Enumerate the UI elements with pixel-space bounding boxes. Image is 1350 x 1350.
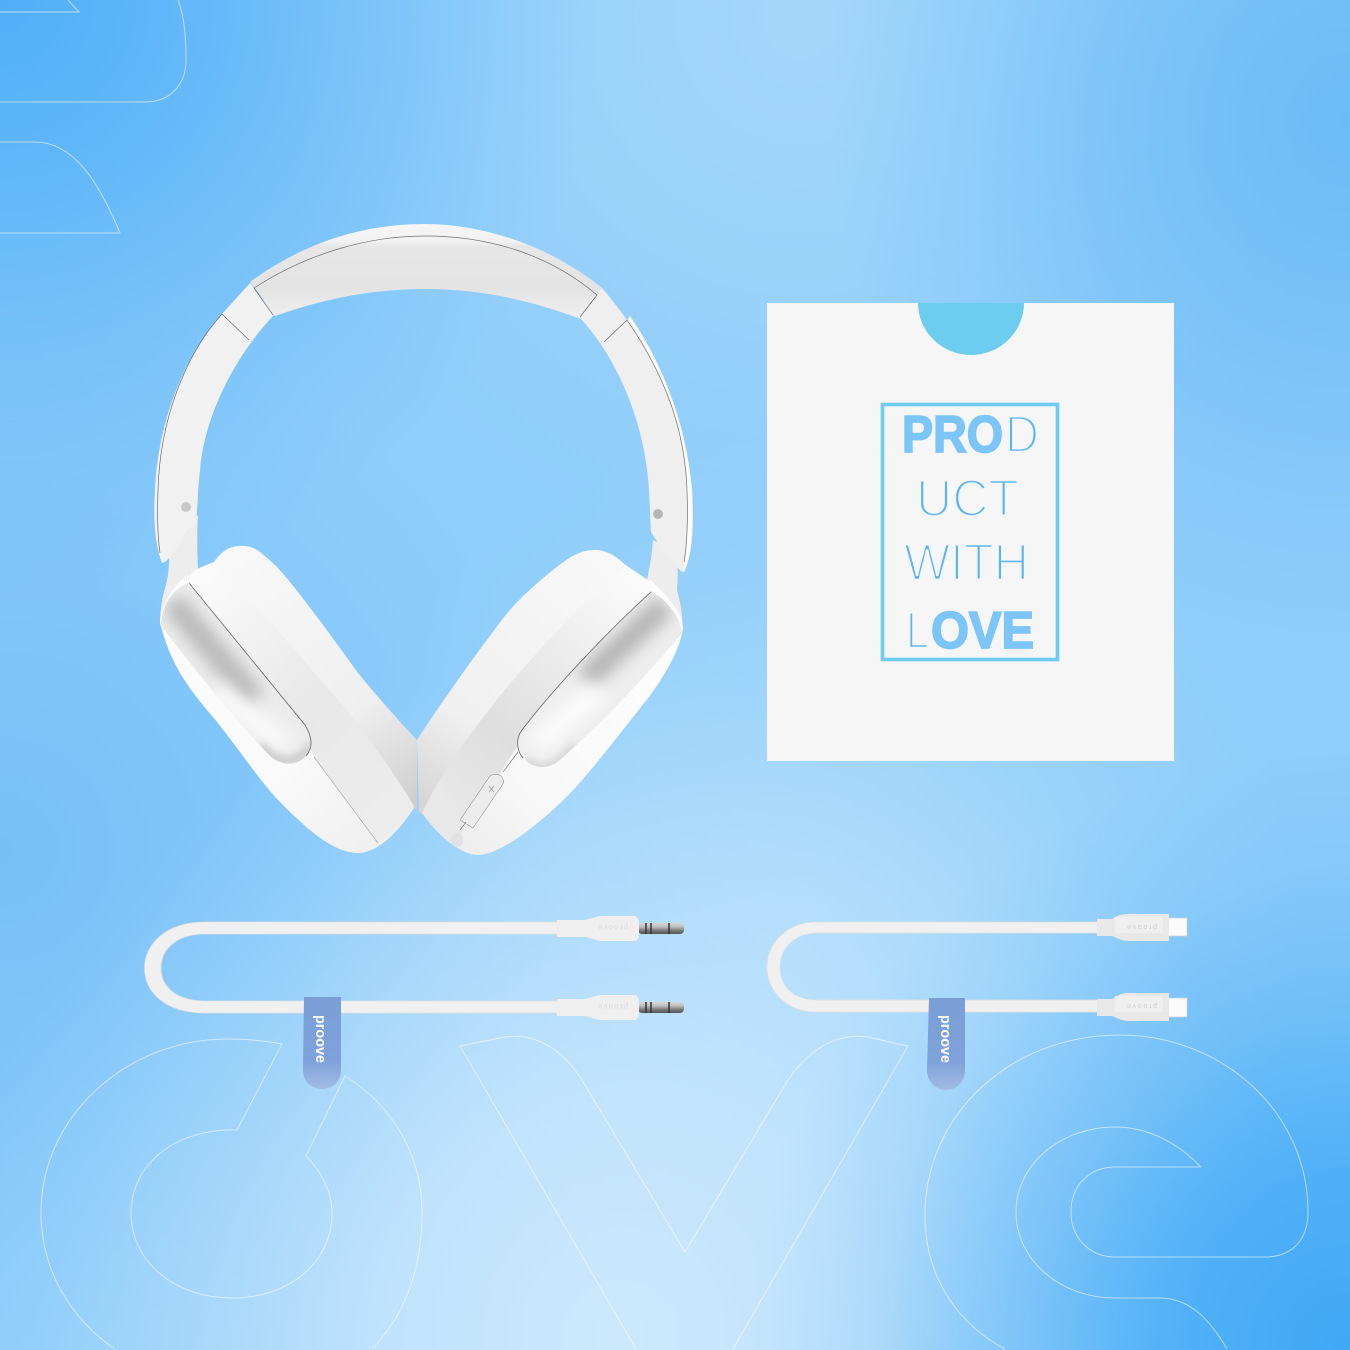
card notch: [918, 303, 1024, 355]
audio cable strap: [303, 997, 341, 1089]
band seams: [158, 236, 687, 562]
right band bright lip: [627, 316, 693, 572]
seam line: [460, 752, 518, 830]
usb-c cable: [767, 914, 1187, 1090]
right yoke arm: [640, 540, 683, 640]
audio strap label: proove: [312, 1015, 329, 1063]
OVE bold: OVE: [931, 602, 1034, 660]
usb-c strap label: proove: [937, 1015, 954, 1063]
usb-c brand: proove: [1127, 1002, 1157, 1009]
usb-c cable strap: [927, 998, 965, 1090]
outline: top-left letter fragments: [0, 0, 186, 233]
usb-c metal tip: [1168, 998, 1187, 1017]
left hinge dot: [181, 502, 191, 512]
right outer shell: [422, 580, 683, 855]
headband: [154, 224, 693, 572]
jack pin: [638, 923, 684, 934]
top usb-c connector: [1097, 914, 1187, 941]
D thin: D: [1005, 406, 1039, 464]
window dark band: [172, 602, 255, 700]
jack brand: proove: [597, 923, 628, 932]
audio cable: [144, 916, 684, 1089]
plus mark: [489, 786, 494, 792]
usb-c housing: [1097, 914, 1169, 941]
jack marks: [646, 1002, 669, 1013]
outline: letter e: [925, 1035, 1308, 1349]
window bright band: [535, 690, 600, 745]
left ear cup: [150, 546, 417, 853]
control buttons: [451, 752, 518, 847]
window lower rim: [261, 745, 312, 761]
bottom usb-c connector: [1097, 993, 1187, 1021]
right inner ring: [422, 566, 652, 845]
card sheet: [767, 303, 1174, 761]
right band section: [580, 288, 693, 572]
usb-c metal tip: [1168, 918, 1187, 936]
left outer shell: [160, 575, 414, 853]
power button: [451, 833, 463, 847]
PRO bold: PRO: [902, 406, 1003, 464]
jack brand: proove: [597, 1002, 628, 1011]
window lower rim: [525, 745, 575, 768]
text frame: [882, 404, 1058, 660]
left ear cushion: [214, 546, 417, 810]
card text: [902, 406, 1039, 660]
window base: [161, 583, 307, 756]
window dark band: [585, 605, 665, 680]
UCT thin: UCT: [916, 470, 1019, 528]
left inner ring: [188, 562, 414, 843]
left yoke arm: [160, 515, 205, 640]
right hinge dot: [653, 509, 663, 519]
right window outline: [518, 592, 651, 758]
L thin: L: [906, 602, 929, 660]
usb-c housing: [1097, 993, 1169, 1021]
left band section: [154, 283, 275, 563]
WITH thin: WITH: [904, 534, 1029, 592]
top band section: [250, 224, 602, 319]
window bright band: [215, 690, 285, 745]
left silver window: [161, 583, 310, 764]
usb-c brand: proove: [1127, 923, 1157, 930]
usb-c inner panel: [1115, 917, 1163, 933]
product card: [767, 303, 1174, 761]
bottom jack: [557, 995, 684, 1020]
usb-c cable wire: [767, 922, 1100, 1012]
audio cable wire: [144, 922, 560, 1013]
jack collar: [557, 995, 639, 1020]
right ear cup: [417, 550, 690, 855]
right silver window: [518, 591, 682, 767]
right ear cushion: [417, 550, 628, 815]
usb-c inner panel: [1115, 996, 1163, 1012]
outline: letter o: [41, 1039, 422, 1349]
left shell seam: [314, 757, 378, 843]
window base: [518, 591, 682, 760]
jack collar: [557, 916, 639, 941]
headphones: [150, 224, 693, 855]
button rocker: [460, 774, 503, 828]
left window outline: [189, 583, 311, 756]
jack marks: [646, 923, 669, 934]
top jack: [557, 916, 684, 941]
outline: letter v: [460, 1036, 908, 1349]
jack pin: [638, 1002, 684, 1013]
